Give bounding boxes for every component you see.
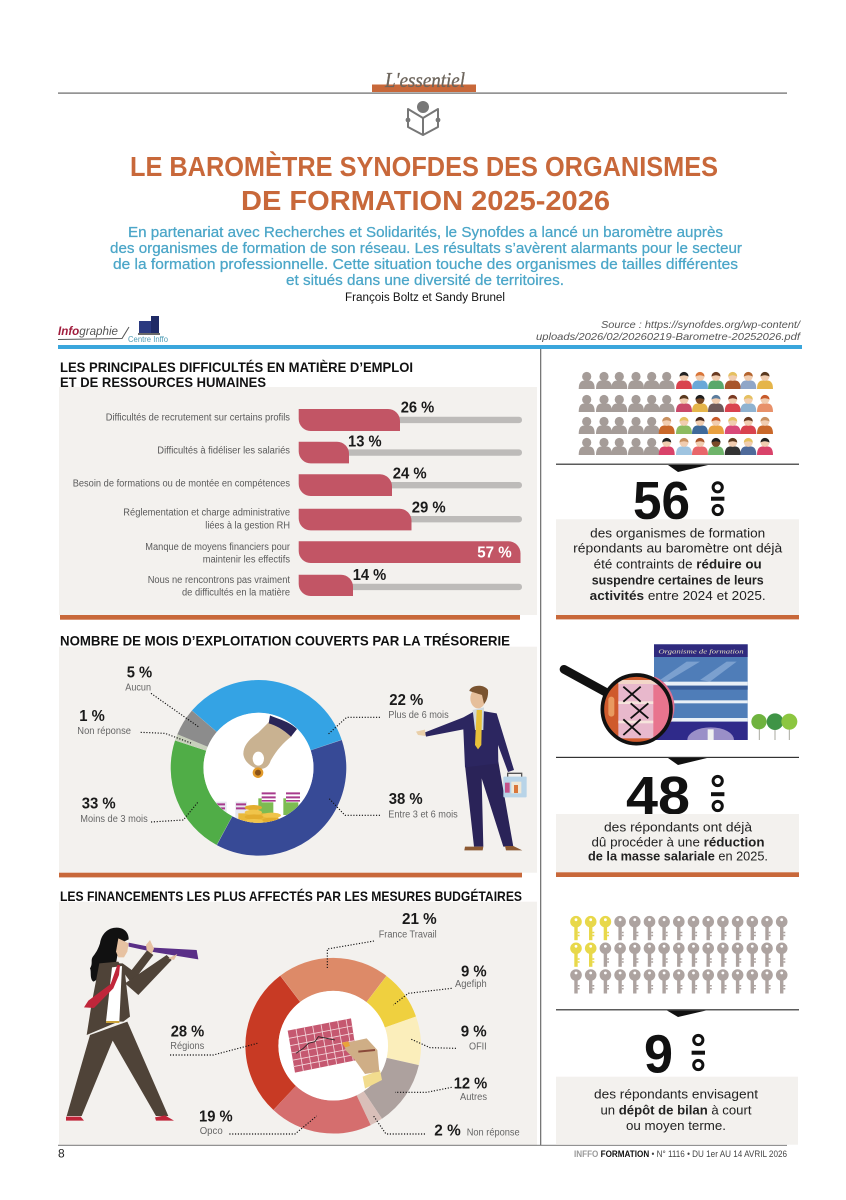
chart labels: Aucun xyxy=(125,683,151,694)
chart labels: 9 % xyxy=(461,1023,487,1040)
chart labels: 33 % xyxy=(82,795,116,812)
heading: LES PRINCIPALES DIFFICULTÉS EN MATIÈRE D’EMPLOI xyxy=(60,359,413,375)
panel: months covered by treasury xyxy=(59,633,537,873)
bar chart: de difficultés en la matière xyxy=(182,588,290,599)
title: LE BAROMÈTRE SYNOFDES DES ORGANISMES xyxy=(130,151,718,182)
chart labels: 12 % xyxy=(454,1075,487,1092)
bar chart: Difficultés à fidéliser les salariés xyxy=(157,446,290,456)
heading: ET DE RESSOURCES HUMAINES xyxy=(60,374,266,390)
chart labels: 38 % xyxy=(389,791,423,808)
panel: 48 percent xyxy=(556,644,799,877)
bottom rule xyxy=(58,1145,787,1146)
text block: ou moyen terme. xyxy=(626,1119,726,1133)
key figure: 56: 56 xyxy=(633,471,690,531)
section tag: L'essentiel: L'essentiel xyxy=(384,68,465,92)
chart labels: 2 % xyxy=(434,1123,461,1140)
text block: des organismes de formation xyxy=(590,526,765,540)
text block: répondants au baromètre ont déjà xyxy=(573,542,782,556)
blue rule xyxy=(58,345,802,349)
chart labels: Entre 3 et 6 mois xyxy=(388,810,458,821)
text block xyxy=(556,519,799,615)
chart labels: Opco xyxy=(200,1126,223,1137)
donut chart: treasury xyxy=(158,667,359,868)
chart labels: France Travail xyxy=(379,930,437,941)
text block: un dépôt de bilan à court xyxy=(600,1103,752,1117)
illustration: magnifier over training building xyxy=(564,644,797,744)
percent sign xyxy=(711,776,724,811)
panel: 56 percent xyxy=(556,372,799,619)
footer credit: INFFO FORMATION • N° 1116 • DU 1er AU 14 AVRIL 2026 xyxy=(574,1149,787,1159)
chart labels: Non réponse xyxy=(467,1128,520,1139)
text block: des répondants ont déjà xyxy=(604,821,752,835)
chart labels: Non réponse xyxy=(77,726,131,737)
text block: des répondants envisagent xyxy=(594,1087,759,1101)
chart labels: Autres xyxy=(460,1092,487,1103)
title xyxy=(130,151,718,216)
chart labels xyxy=(170,911,520,1140)
bar chart: 24 % xyxy=(393,465,427,482)
chart labels: 5 % xyxy=(127,665,152,682)
illustration: man in suit with briefcase xyxy=(416,686,527,850)
key figure: 9: 9 xyxy=(644,1024,673,1084)
infographie logo: Infographie xyxy=(58,326,118,338)
bar chart: Besoin de formations ou de montée en compétences xyxy=(73,478,290,490)
column divider xyxy=(540,349,541,1145)
intro text: de la formation professionnelle. Cette situation touche des organismes de tailles différentes xyxy=(113,257,738,273)
bar chart: 26 % xyxy=(401,400,434,417)
chart labels: Moins de 3 mois xyxy=(80,814,148,825)
chart labels: 1 % xyxy=(79,708,105,725)
heading: NOMBRE DE MOIS D’EXPLOITATION COUVERTS PAR LA TRÉSORERIE xyxy=(60,633,510,649)
chart labels: 9 % xyxy=(461,963,487,980)
icon grid: keys xyxy=(570,916,788,994)
heading: LES FINANCEMENTS LES PLUS AFFECTÉS PAR LES MESURES BUDGÉTAIRES xyxy=(60,888,522,904)
chart labels: 22 % xyxy=(389,692,423,709)
panel: employment difficulties xyxy=(59,359,537,615)
intro text xyxy=(110,225,742,289)
infographie logo: Centre Inffo xyxy=(128,335,169,344)
percent sign xyxy=(711,483,724,515)
chart labels: 21 % xyxy=(402,911,437,928)
illustration: hand drawing curve on chart xyxy=(288,1018,382,1089)
text block: suspendre certaines de leurs xyxy=(592,573,764,587)
chart labels: Régions xyxy=(170,1041,204,1052)
chart labels: 28 % xyxy=(171,1023,204,1040)
divider with notch xyxy=(556,464,799,472)
authors: François Boltz et Sandy Brunel xyxy=(345,292,505,304)
key figure: 48: 48 xyxy=(626,766,690,826)
infographie logo xyxy=(58,316,169,344)
header rule xyxy=(58,92,787,94)
bar chart: 29 % xyxy=(412,500,446,517)
illustration: magnifier over training building: Organisme de formation xyxy=(658,648,745,655)
bar chart: Nous ne rencontrons pas vraiment xyxy=(148,575,290,586)
percent sign xyxy=(692,1035,705,1070)
text block xyxy=(556,1077,798,1145)
text block: de la masse salariale en 2025. xyxy=(588,850,768,864)
bar chart: 14 % xyxy=(353,567,386,584)
bar chart: Réglementation et charge administrative xyxy=(123,508,290,518)
bar chart: liées à la gestion RH xyxy=(205,520,290,532)
text block: activités entre 2024 et 2025. xyxy=(590,589,766,603)
page number: 8 xyxy=(58,1146,65,1160)
text block: été contraints de réduire ou xyxy=(594,558,762,572)
title: DE FORMATION 2025-2026 xyxy=(241,185,610,216)
text block: dû procéder à une réduction xyxy=(592,836,764,850)
dotted leader lines xyxy=(170,941,456,1134)
intro text: et situés dans une diversité de territoires. xyxy=(286,273,564,289)
chart labels: OFII xyxy=(469,1042,487,1053)
chart labels: Plus de 6 mois xyxy=(388,710,449,721)
bar chart: Difficultés de recrutement sur certains profils xyxy=(106,412,290,424)
bar chart: maintenir les effectifs xyxy=(203,555,290,566)
bar chart: Manque de moyens financiers pour xyxy=(145,542,291,553)
dotted leader lines xyxy=(141,693,380,822)
donut chart: funding xyxy=(232,945,434,1146)
heading xyxy=(60,359,413,390)
panel: most affected funding xyxy=(59,888,537,1146)
illustration: woman with telescope xyxy=(66,928,198,1121)
bar chart: 57 % xyxy=(477,544,512,561)
source note xyxy=(536,319,801,343)
chart labels: 19 % xyxy=(199,1109,233,1126)
infographic page xyxy=(58,72,802,1158)
source note: uploads/2026/02/20260219-Barometre-20252026.pdf xyxy=(536,331,801,343)
icon: reader with book xyxy=(406,101,440,135)
bar chart xyxy=(73,400,522,599)
intro text: des organismes de formation de son réseau. Les résultats s’avèrent alarmants pour le secteur xyxy=(110,241,742,257)
text block xyxy=(556,814,799,872)
chart labels: Agefiph xyxy=(455,979,487,990)
intro text: En partenariat avec Recherches et Solidarités, le Synofdes a lancé un baromètre auprès xyxy=(128,225,723,241)
divider with notch xyxy=(556,1009,799,1017)
divider with notch xyxy=(556,757,799,765)
illustration: hand dropping coin over money xyxy=(215,715,300,824)
panel: 9 percent xyxy=(556,916,799,1145)
bar chart: 13 % xyxy=(348,434,382,451)
chart labels xyxy=(77,665,458,825)
icon grid: people xyxy=(579,372,773,455)
source note: Source : https://synofdes.org/wp-content/ xyxy=(601,319,801,331)
